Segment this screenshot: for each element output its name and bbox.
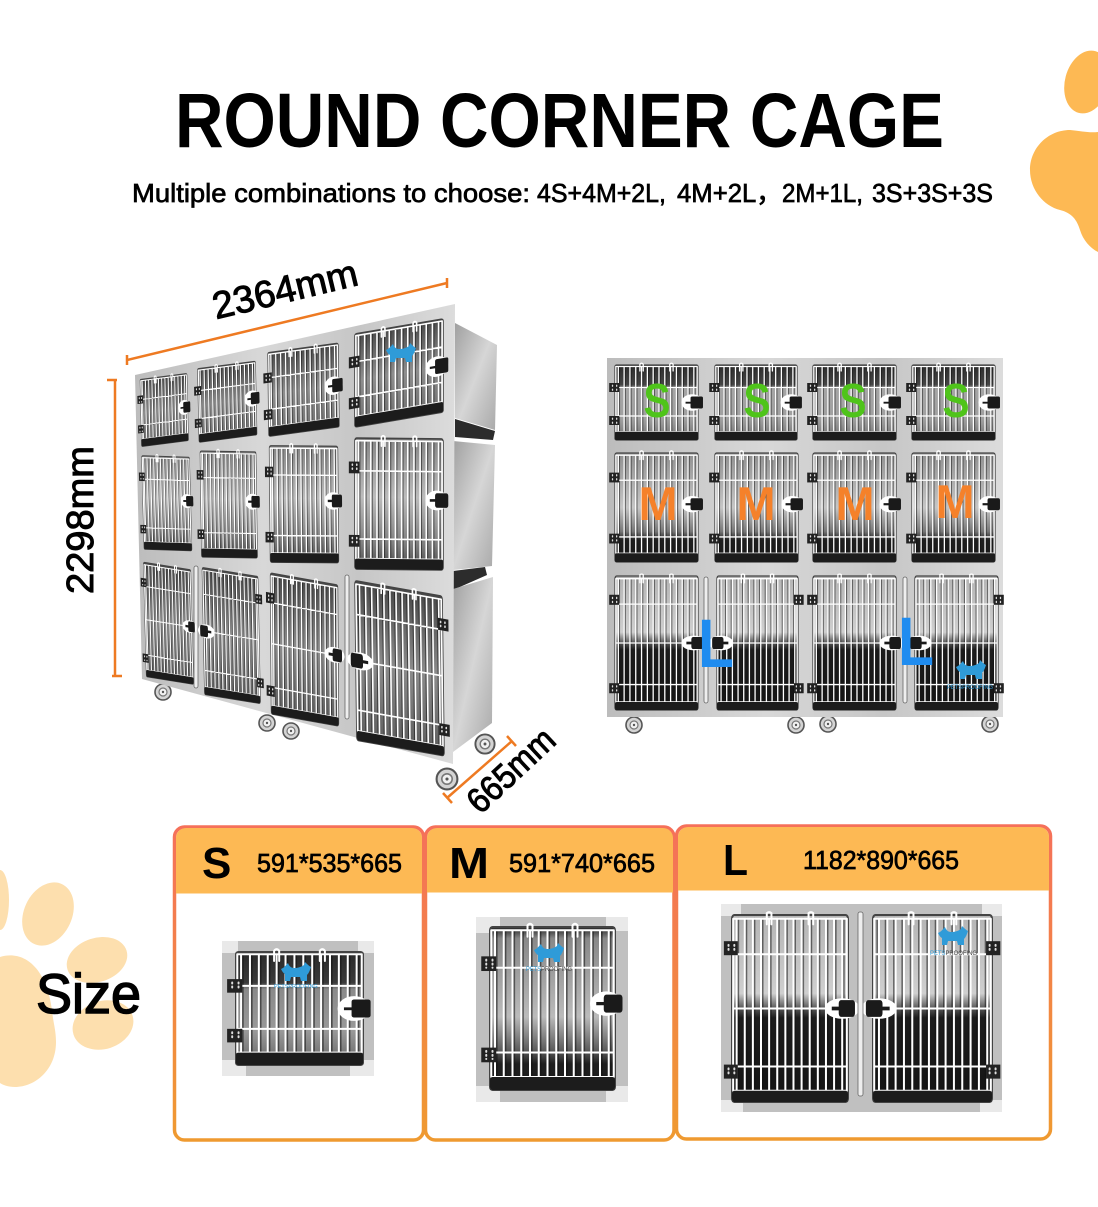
M dimensions: 591*740*665 xyxy=(509,848,655,878)
L cage photo: PETSPROOFING xyxy=(930,951,977,957)
front strut slots xyxy=(704,577,907,703)
S cage photo: PETSPROOFING xyxy=(274,984,318,990)
M card outline xyxy=(426,827,674,1140)
L dimensions: 1182*890*665 xyxy=(803,845,959,875)
S letter: S xyxy=(202,839,231,888)
front doors: S row xyxy=(609,363,1000,440)
S cage photo xyxy=(222,941,374,1076)
cage frame xyxy=(135,304,455,764)
panel: perspective cage with dimensions xyxy=(60,253,563,821)
cage strut slots xyxy=(194,566,349,719)
S card header xyxy=(176,828,422,894)
panel: size S card xyxy=(174,827,424,1140)
subtitle: 4S+4M+2L, xyxy=(537,178,666,208)
letters M: M xyxy=(638,477,678,530)
M cage photo xyxy=(476,917,628,1102)
doors: middle row medium xyxy=(138,435,448,570)
L card outline xyxy=(676,826,1050,1139)
dimension: width label: 2364mm xyxy=(208,253,362,328)
letters M: M xyxy=(936,475,974,528)
letters L: L xyxy=(698,605,734,682)
front doors: L row xyxy=(609,574,1004,710)
dimension: height label: 2298mm xyxy=(60,446,102,594)
subtitle: 3S+3S+3S xyxy=(872,178,993,208)
letters M xyxy=(638,475,974,530)
icon: brand dog xyxy=(956,660,986,679)
dimension: width arrow xyxy=(127,278,447,365)
cage side panels xyxy=(453,323,497,752)
letters S: S xyxy=(744,375,770,428)
dimension: depth label: 665mm xyxy=(459,720,563,821)
title: ROUND CORNER CAGE xyxy=(175,78,944,164)
letters S: S xyxy=(644,375,670,428)
front frame xyxy=(607,358,1003,717)
doors: top row small xyxy=(137,316,448,447)
subtitle: Multiple combinations to choose: xyxy=(132,178,530,208)
panel: size M card xyxy=(426,827,674,1140)
M letter: M xyxy=(449,839,489,888)
paw: top right decoration xyxy=(1030,45,1098,252)
brand text: PETSPROOFING xyxy=(947,685,993,691)
letters L xyxy=(698,603,934,682)
letters S: S xyxy=(942,375,970,428)
S dimensions: 591*535*665 xyxy=(257,848,402,878)
letters S: S xyxy=(840,375,866,428)
L cage photo xyxy=(721,904,1002,1112)
paw: bottom left decoration xyxy=(0,870,140,1087)
front wheels xyxy=(626,716,998,733)
dimension: depth arrow xyxy=(443,736,516,803)
icon: brand dog xyxy=(386,343,416,362)
heading: size: Size xyxy=(36,962,141,1025)
panel: size L card xyxy=(676,826,1050,1139)
M cage photo: PETSPROOFING xyxy=(526,966,572,973)
dimension: height arrow xyxy=(107,380,122,676)
subtitle: 4M+2L， xyxy=(677,178,782,208)
M card header xyxy=(427,828,673,892)
cage wheels xyxy=(155,684,495,789)
letters L: L xyxy=(898,603,934,680)
L card header xyxy=(678,827,1049,890)
letters M: M xyxy=(836,477,874,530)
panel: front view cage with size letters xyxy=(607,358,1004,733)
letters M: M xyxy=(736,477,776,530)
subtitle xyxy=(132,178,993,208)
subtitle: 2M+1L, xyxy=(782,178,863,208)
front doors: M row xyxy=(609,451,1000,562)
L letter: L xyxy=(723,836,748,885)
letters S xyxy=(644,375,970,428)
doors: bottom row large xyxy=(140,560,450,757)
S card outline xyxy=(174,827,424,1140)
